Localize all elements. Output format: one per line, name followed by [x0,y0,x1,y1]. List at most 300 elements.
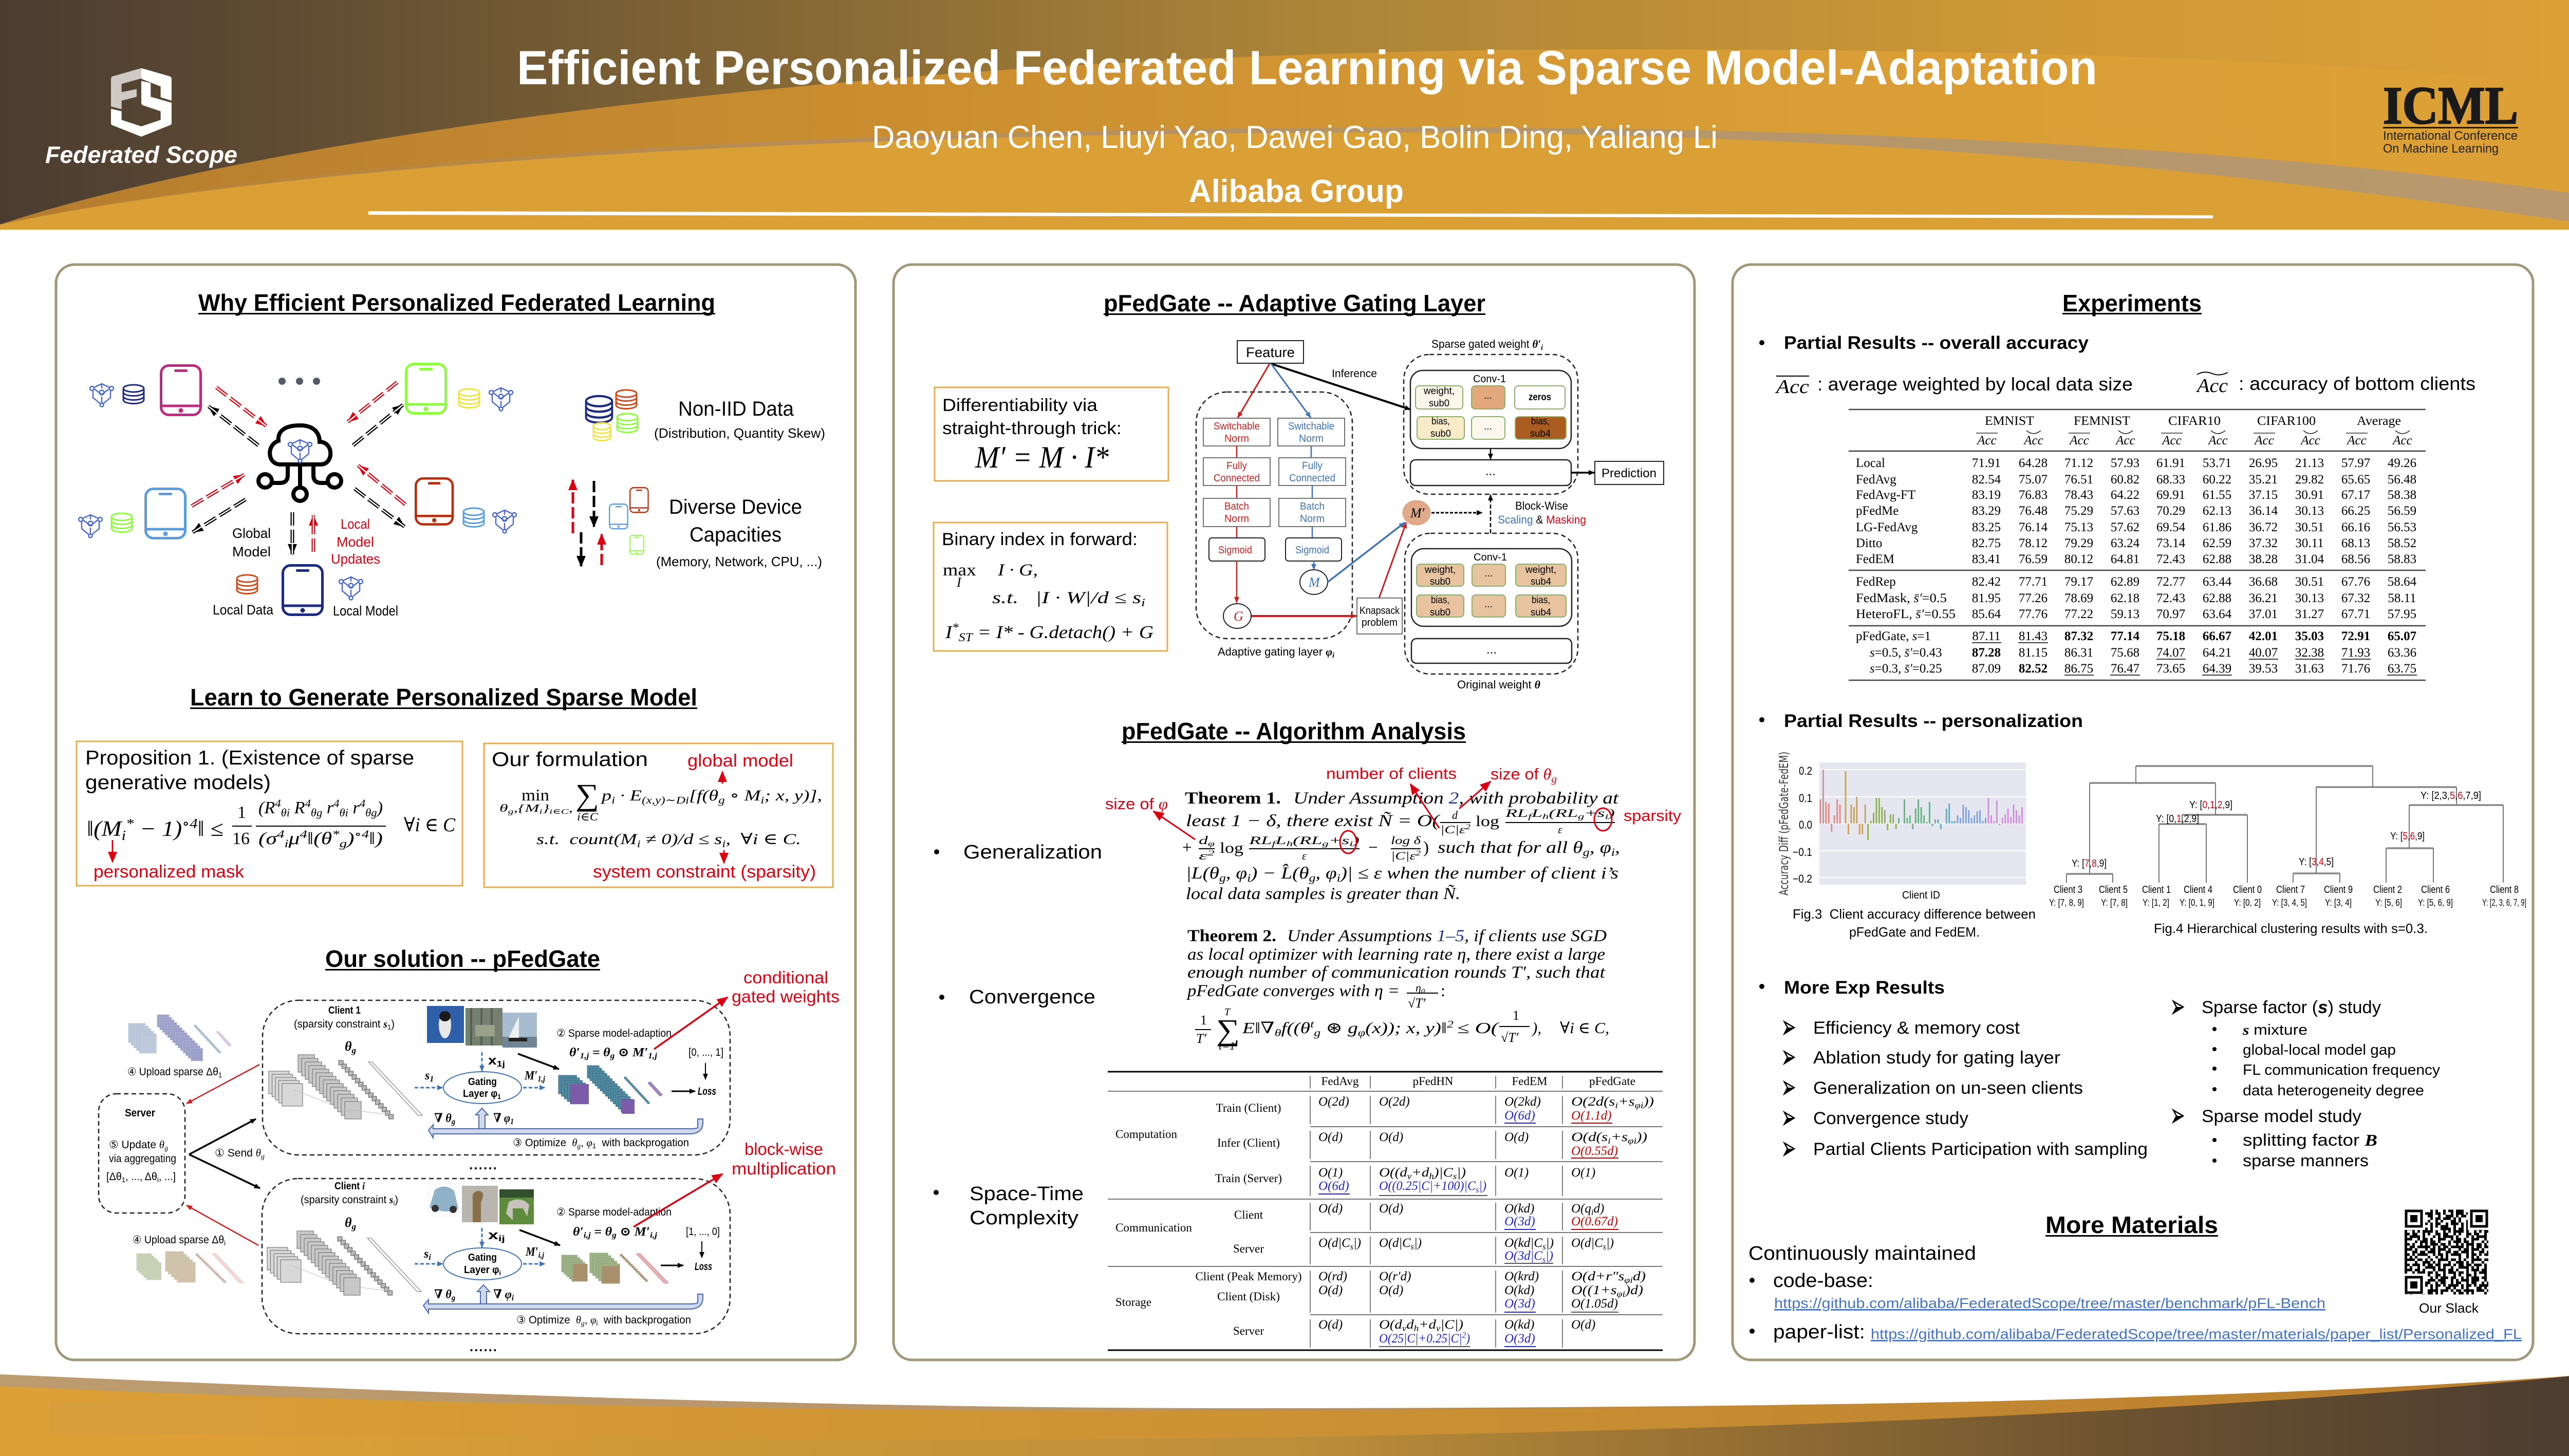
data rows: 30.91 [2295,488,2324,502]
bullet: personalization: Partial Results -- personalization [1784,711,2083,731]
data rows: 57.95 [2388,607,2416,621]
data rows: 64.39 [2203,662,2231,676]
data rows: 82.54 [1972,473,2001,487]
leaf class labels: Y: [1, 2] [2143,898,2169,908]
annotation: size of phi [1105,795,1195,839]
formula: objective: min [522,786,549,804]
client i contents: θg [345,1215,357,1231]
block-wise scaling and masking label: Block-Wise [1515,499,1568,512]
image samples [427,1183,534,1224]
theorem 1: |L(θ g, φ i) − L̂(θ g, φ i)| ≤ ε when the number of client i’s [1186,864,1618,884]
heading: experiments: Experiments [2062,290,2202,316]
client i contents: [1, ..., 0] [686,1226,720,1238]
upload feature maps bottom [137,1252,244,1283]
FedAvg column: O(rd) [1318,1270,1347,1283]
annotation: number of clients [1326,764,1457,828]
pFedGate column: O(1.1d) [1571,1109,1611,1123]
annotation: block-wise multiplication: multiplication [732,1159,836,1178]
data rows: 75.29 [2064,504,2093,518]
list: experiments left: Convergence study [1813,1109,1968,1128]
data rows: 70.29 [2156,504,2185,518]
data rows: 30.51 [2295,520,2324,534]
upload label bottom: ④ Upload sparse Δθi [133,1234,226,1247]
legend: bottom clients accuracy: Acc [2195,375,2228,397]
FedEM column: O(kd|Cs|) [1504,1236,1554,1252]
node class labels: Y: [3,4,5] [2299,856,2334,868]
original weight block: sub0 [1430,576,1450,587]
middle ellipsis: ...... [469,1157,497,1172]
caption: fig 3: Fig.3 Client accuracy difference between [1793,906,2036,922]
axis labels: Accuracy Diff (pFedGate-FedEM) [1777,752,1791,895]
list: experiments right: Sparse factor (s) study [2202,998,2381,1017]
client i contents: Client i [334,1181,365,1192]
data rows: 72.91 [2341,629,2370,643]
data rows: 66.16 [2341,520,2370,534]
data rows: 63.75 [2388,662,2416,676]
data rows: 77.26 [2019,591,2047,605]
data rows: 72.43 [2156,591,2185,605]
row labels: Client (Disk) [1217,1290,1280,1303]
red branch: Switchable [1214,421,1260,432]
sparse gated weight block: Sparse gated weight θ′i [1431,338,1543,352]
pFedGate column: O(1) [1571,1166,1595,1180]
data rows: 36.68 [2249,575,2278,589]
data rows: 81.15 [2019,646,2047,660]
annotation: number of clients: number of clients [1326,764,1457,782]
pFedGate column: O(d(s i+s φi)) [1571,1130,1647,1146]
column headers: pFedGate [1589,1075,1635,1088]
data rows: 62.89 [2111,575,2139,589]
bullet: space-time complexity: Space-Time [970,1183,1084,1205]
labels: Model [232,544,271,559]
theorem 1 [1105,764,1682,903]
data rows: 56.59 [2388,504,2416,518]
sparse gated weight block: sub4 [1530,428,1551,439]
callout: non-IID data [586,390,825,441]
annotation: size of phi: size of φ [1105,795,1168,813]
red branch [1203,364,1356,628]
gating layer: Layer φ1 [463,1088,501,1100]
adaptive gating caption: Adaptive gating layer φi [1218,645,1334,660]
affiliation: Alibaba Group [1189,174,1404,209]
panel frame [56,265,855,1360]
data rows: 62.13 [2203,504,2231,518]
flowchart: adaptive gating layer [1196,338,1664,691]
gating layer: Layer φi [464,1264,501,1277]
data rows: 78.43 [2064,488,2093,502]
footer banner [0,1374,2569,1456]
data rows: 36.72 [2249,520,2278,534]
data rows: 66.25 [2341,504,2370,518]
theorem 1: RL fL h(RL g+s i) [1504,807,1615,821]
backprop arrow [423,1285,703,1313]
feature box [1237,341,1304,363]
client i contents: θ′i,j = θg ⊙ M′ i,j [573,1225,658,1240]
data rows: 58.83 [2388,552,2416,566]
sparse gated weight block: Conv-1 [1473,374,1506,385]
box: binary index: Binary index in forward: [942,530,1138,549]
data rows: 63.44 [2203,575,2232,589]
underlined values [1972,643,2417,675]
annotation: block-wise multiplication: block-wise [744,1140,823,1159]
row labels: Ditto [1856,536,1882,550]
leaf class labels [2049,898,2526,908]
FedAvg column: O(d) [1318,1202,1343,1216]
client labels: Client 6 [2421,884,2450,895]
FedAvg column: O(6d) [1318,1179,1349,1193]
client 1 dashed region [263,1000,730,1155]
data rows: 87.09 [1972,662,2001,676]
data rows: 60.22 [2203,473,2231,487]
data rows: 76.59 [2019,552,2047,566]
data rows: 60.82 [2111,473,2139,487]
theorem 2: ), [1531,1019,1541,1037]
original weight block: sub4 [1531,576,1551,587]
data rows: 78.12 [2019,536,2047,550]
annotation: size of theta: size of θg [1491,765,1557,785]
label: our slack: Our Slack [2419,1300,2479,1316]
theorem 2: η0 [1416,981,1425,996]
pFedGate column: O(d) [1571,1318,1595,1332]
table: overall accuracy [1849,409,2426,680]
annotation: block-wise multiplication [634,1140,836,1227]
feature box: Feature [1246,345,1295,360]
pFedHN column: O(d) [1379,1283,1403,1297]
arrows: local updates upload [192,382,405,552]
data rows: 75.18 [2156,629,2185,643]
chart: client accuracy difference: Client ID [1902,889,1940,901]
data rows: 56.53 [2388,520,2416,534]
data rows: 58.52 [2388,536,2416,550]
pFedHN column: O(2d) [1379,1095,1410,1109]
data rows: 36.14 [2249,504,2278,518]
client i dashed region [262,1179,730,1334]
axis tick labels [1793,764,1812,885]
knapsack box: Knapsack [1360,605,1400,617]
data rows: 64.28 [2019,456,2047,470]
bullet: overall accuracy: Partial Results -- overall accuracy [1784,333,2089,353]
theorem 1: least 1 − δ, there exist Ñ = O( [1186,811,1440,830]
original weight block: ... [1486,643,1497,657]
box: differentiability: straight-through trick: [942,419,1122,438]
formula: objective: pi · E (x,y)∼Di [f(θ g ∘ M i; x, y)], [600,787,822,806]
pFedGate column [1571,1095,1654,1332]
data rows: 61.55 [2203,488,2231,502]
data rows: 57.93 [2111,456,2139,470]
red branch: Sigmoid [1218,545,1252,556]
row labels [1195,1102,1302,1337]
chart: client accuracy difference [1777,752,2026,901]
list: experiments left: Partial Clients Participation with sampling [1813,1140,2148,1159]
theorem 1: local data samples is greater than Ñ. [1186,884,1460,903]
panel frame [1733,265,2533,1360]
row labels: FedAvg [1856,473,1896,487]
original weight block: sub0 [1430,607,1450,618]
node class labels: Y: [7,8,9] [2072,858,2107,869]
data rows: 63.64 [2203,607,2232,621]
data rows: 75.07 [2019,473,2047,487]
bullet: space-time complexity [934,1183,1084,1229]
panel: right column [1733,265,2533,1360]
sub headers: Acc [2346,434,2367,447]
data rows: 26.95 [2249,456,2278,470]
row labels: Server [1233,1242,1264,1255]
FedAvg column: O(d) [1318,1318,1343,1332]
sparse gated weight block [1404,338,1578,494]
theorem 2: ≤ O( [1457,1019,1499,1037]
FedEM column: O(2kd) [1504,1095,1541,1109]
data rows: 77.22 [2064,607,2093,621]
dataset headers: FEMNIST [2074,414,2130,428]
data rows: 63.36 [2388,646,2416,660]
list: experiments right: splitting factor B [2243,1131,2377,1149]
blue branch [1271,364,1405,594]
client i contents: M′i,j [525,1245,545,1260]
data rows: 82.75 [1972,536,2001,550]
theorem 1: log δ [1391,834,1421,847]
client 1 contents: x1j [488,1054,505,1069]
theorem 1: |C|ε 2 [1391,849,1421,862]
data rows: 75.68 [2111,646,2139,660]
theorem 1: + [1182,838,1192,857]
axis tick labels: −0.2 [1793,872,1812,885]
sparse gated weight block: bias, [1531,416,1550,427]
gating layer: Gating [468,1076,497,1088]
data rows: 65.07 [2388,629,2416,643]
theorem 1: ε 2 [1199,849,1215,862]
pFedGate column: O(d|Cs|) [1571,1236,1614,1252]
heading: algorithm analysis: pFedGate -- Algorithm Analysis [1122,718,1466,744]
theorem 1: |C|ε 2 [1440,823,1470,836]
list: experiments right: data heterogeneity degree [2243,1082,2424,1099]
logo: ICML: International Conference [2383,129,2518,143]
data rows: 35.21 [2249,473,2278,487]
theorem 1: such that for all θ g, φ i, [1438,838,1620,858]
list: experiments right: s mixture [2242,1022,2307,1038]
inference arrow: Inference [1332,368,1377,380]
leaf class labels: Y: [2, 3, 6, 7, 9] [2482,898,2526,908]
data rows: 85.64 [1972,607,2001,621]
client i contents: Loss [695,1261,712,1273]
box: proposition 1 [77,741,462,886]
client i contents [267,1181,720,1327]
knapsack box: problem [1362,617,1398,628]
data rows: 37.01 [2249,607,2278,621]
gradient labels: ∇ θg [434,1112,455,1126]
data rows: 21.13 [2295,456,2324,470]
node class labels: Y: [5,6,9] [2390,831,2425,842]
original weight block: bias, [1532,595,1550,606]
data rows: 70.97 [2156,607,2185,621]
sub headers: Acc [2254,434,2274,447]
client labels: Client 1 [2142,884,2171,895]
data rows: 31.04 [2295,552,2324,566]
data rows: 87.28 [1972,646,2001,660]
data rows: 71.91 [1972,456,2001,470]
data rows: 61.91 [2156,456,2185,470]
sparse gated weight block: ... [1484,390,1492,401]
sub headers [1976,431,2412,447]
theorem 1: Theorem 1. [1185,789,1281,808]
bullet: more exp results: More Exp Results [1784,978,1945,998]
theorem 2: √T′ [1501,1030,1519,1045]
pFedHN column: O((d v+d h)|C s|) [1379,1166,1466,1181]
theorem 1: ) [1423,838,1429,857]
data rows: 82.42 [1972,575,2001,589]
callout: diverse device capacities [573,480,822,569]
FedEM column: O(3d) [1504,1297,1535,1311]
panel: middle column [893,265,1695,1360]
data rows: 62.59 [2203,536,2231,550]
bottom ellipsis: ...... [470,1339,497,1354]
data rows: 57.97 [2341,456,2370,470]
bullet: convergence: Convergence [969,986,1095,1008]
sub headers: Acc [2207,434,2228,447]
data rows: 74.07 [2156,646,2185,660]
node class labels: Y: [0,1,2,9] [2156,813,2199,825]
column headers: pFedHN [1413,1075,1454,1088]
client 1 contents: ③ Optimize θg, φ1 with backprogation [513,1136,689,1150]
server box: Server [125,1107,155,1119]
blue branch: Switchable [1288,421,1334,432]
row group labels: Communication [1115,1221,1192,1234]
row labels: FedAvg-FT [1856,488,1915,502]
sub headers: Acc [2023,434,2043,447]
FedAvg column [1318,1095,1361,1332]
clients: phones [146,364,453,614]
original weight block: ... [1484,599,1493,610]
client labels: Client 9 [2324,884,2353,895]
theorem 2: enough number of communication rounds T′, such that [1187,963,1606,982]
data rows: 67.32 [2341,591,2370,605]
pFedHN column [1379,1095,1487,1347]
data rows: 83.25 [1972,520,2001,534]
client labels: Client 5 [2099,884,2128,895]
annotation: size of theta [1459,765,1557,809]
blue branch: Sigmoid [1295,545,1329,556]
table: space-time complexity [1108,1072,1663,1350]
diagram: federated network [79,364,516,619]
row labels: s=0.5, s̄′=0.43 [1870,646,1942,660]
data rows: 35.03 [2295,629,2324,643]
caption: fig 4: Fig.4 Hierarchical clustering results with s=0.3. [2154,921,2428,936]
data rows: 69.54 [2156,520,2186,534]
row labels: pFedGate, s=1 [1856,629,1931,643]
FedAvg column: O(d) [1318,1130,1343,1144]
data rows: 39.53 [2249,662,2278,676]
formula: objective: s.t. count(M i ≠ 0)/d ≤ s i, ∀i ∈ C. [536,831,801,850]
data rows: 67.71 [2341,607,2370,621]
server box: via aggregating [109,1153,176,1165]
sparse gated weight block: weight, [1423,386,1455,397]
sub headers: Acc [2115,434,2135,447]
block-wise scaling and masking label [1491,495,1586,533]
bullet: space-time complexity: Complexity [970,1207,1078,1229]
data rows: 61.86 [2203,520,2231,534]
caption: fig 3 [1793,906,2036,940]
data rows: 81.95 [1972,591,2001,605]
data rows: 80.12 [2064,552,2093,566]
row labels [1856,456,1956,676]
data rows: 77.71 [2019,575,2047,589]
theorem 2: as local optimizer with learning rate η, there exist a large [1187,945,1605,964]
client 1 contents: Client 1 [328,1005,361,1016]
theorem 2: t=1 [1219,1039,1235,1052]
data rows: 67.76 [2341,575,2370,589]
box: proposition 1: Proposition 1. (Existence of sparse [85,747,414,769]
client 1 contents: [0, ..., 1] [688,1047,723,1058]
box: binary index [934,522,1167,651]
heading: adaptive gating layer: pFedGate -- Adaptive Gating Layer [1104,290,1485,316]
title: Efficient Personalized Federated Learning via Sparse Model-Adaptation [517,41,2097,95]
FedAvg column: O(1) [1318,1166,1343,1180]
data rows: 68.33 [2156,473,2185,487]
data rows: 73.14 [2156,536,2186,550]
upload label top: ④ Upload sparse Δθ1 [127,1066,222,1079]
sparse gated weight block: sub0 [1429,398,1449,409]
sub headers: Acc [2300,434,2320,447]
data rows: 87.32 [2064,629,2093,643]
client labels: Client 8 [2490,884,2519,895]
box: binary index: s.t. |I · W|/d ≤ s i [992,589,1145,609]
prediction box: Prediction [1602,466,1656,480]
caption: fig 3: pFedGate and FedEM. [1849,924,1980,940]
data rows: 49.26 [2388,456,2416,470]
data rows: 40.07 [2249,646,2278,660]
list: experiments left: Ablation study for gating layer [1813,1048,2060,1068]
annotation: conditional gated weights: conditional [743,968,828,987]
gating layer [443,1248,522,1280]
annotation: sparsity circles [1340,808,1612,853]
data rows: 83.19 [1972,488,2001,502]
formula: proposition bound: ‖(Mi* − 1) ∘4‖ ≤ [87,815,224,843]
sparse gated weight block: ... [1484,421,1492,432]
client labels: Client 3 [2054,884,2082,895]
data rows: 29.82 [2295,473,2324,487]
data rows: 42.01 [2249,629,2278,643]
data rows: 30.13 [2295,504,2324,518]
red branch: G [1234,609,1243,624]
formula: objective: i∈C [577,810,598,823]
theorem 1: ε [1558,823,1562,836]
data rows: 73.65 [2156,662,2185,676]
data rows: 32.38 [2295,646,2324,660]
data rows: 30.51 [2295,575,2324,589]
data rows: 76.51 [2064,473,2093,487]
blue branch: Batch [1300,501,1325,512]
logo: ICML: ICML [2383,76,2518,135]
data rows: 58.38 [2388,488,2416,502]
theorem 2: √T′ [1408,996,1426,1011]
labels: Local Data [213,602,274,618]
pFedHN column: O((0.25|C|+100)|Cs|) [1379,1179,1486,1194]
sub headers: Acc [2392,434,2412,447]
client labels: Client 4 [2184,884,2212,895]
chart: hierarchical clustering dendrogram [2049,766,2526,908]
labels: Local Model [333,603,398,619]
link: code-base [1749,1270,2325,1311]
client 1 contents: M′1,j [524,1069,546,1084]
knapsack box [1357,522,1406,634]
blue branch: M [1308,575,1320,590]
client labels: Client 0 [2233,884,2262,895]
legend: average accuracy: : average weighted by local data size [1817,374,2133,395]
leaf class labels: Y: [5, 6, 9] [2418,898,2453,908]
axis tick labels: −0.1 [1793,846,1812,858]
inference arrow [1271,364,1410,409]
dataset headers: Average [2357,414,2401,428]
grey CNN [267,1231,421,1295]
